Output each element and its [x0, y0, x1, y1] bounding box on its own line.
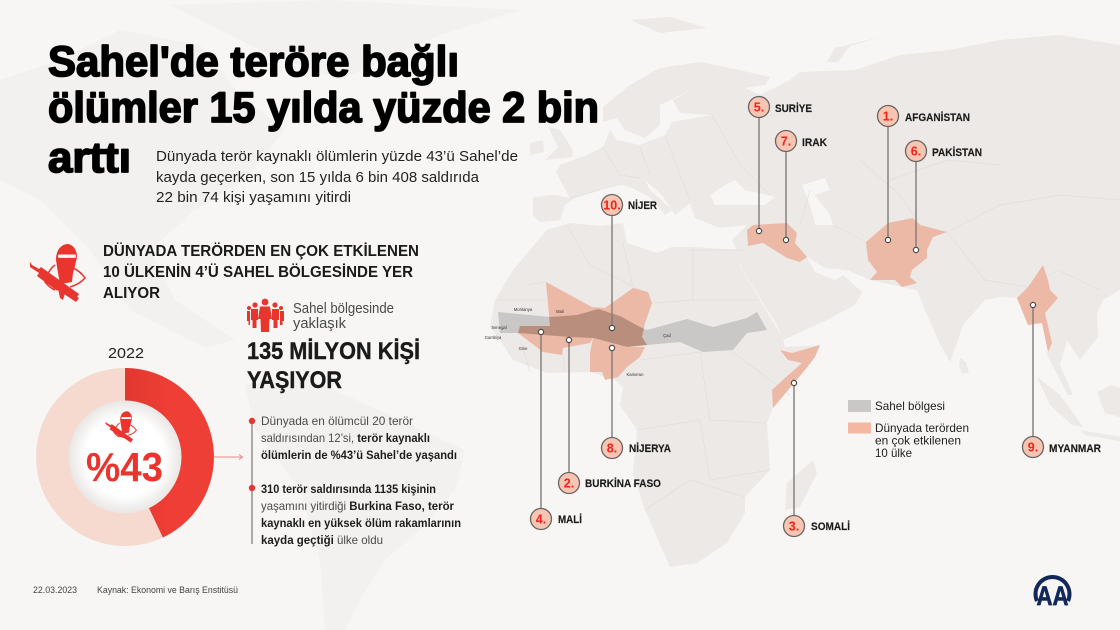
text: burkina faso: yaşamını yitirdiği Burkina Faso, terör — [261, 499, 454, 513]
pin 7 iraq: 7. — [781, 134, 791, 148]
pin 2 burkina faso: 2. — [564, 476, 574, 490]
subtitle: 22 bin 74 kişi yaşamını yitirdi — [156, 190, 351, 206]
text: deadliest attacks: Dünyada en ölümcül 20 terör — [261, 414, 413, 428]
pin 2 burkina faso — [558, 337, 661, 494]
subtitle — [156, 149, 518, 206]
text: deadliest attacks — [261, 414, 457, 462]
map country names: Moritanya — [514, 307, 533, 312]
text: population figure: YAŞIYOR — [247, 367, 342, 394]
sahel region band — [498, 309, 767, 352]
pin 9 myanmar: 9. — [1028, 440, 1038, 454]
map country names — [485, 307, 672, 377]
pin 1 afghanistan — [878, 106, 970, 243]
map country names: Mali — [556, 309, 564, 314]
text: sahel population intro: Sahel bölgesinde — [293, 301, 394, 317]
pin 5 syria — [748, 96, 812, 234]
pin 4 mali: MALİ — [558, 513, 582, 526]
pin 1 afghanistan: AFGANİSTAN — [905, 111, 970, 124]
legend: 10 ülke — [875, 446, 912, 460]
pin 8 nigeria: NİJERYA — [629, 442, 671, 455]
text: deadliest attacks: saldırısından 12’si, terör kaynaklı — [261, 431, 430, 445]
pin 10 niger — [602, 194, 657, 331]
country: myanmar — [1017, 265, 1058, 352]
text: sahel population intro: yaklaşık — [293, 316, 347, 332]
logo: AA: AA — [1036, 581, 1068, 611]
heading: affected countries: 10 ÜLKENİN 4’Ü SAHEL BÖLGESİNDE YER — [103, 264, 413, 281]
icon: militant — [30, 244, 85, 302]
pin 5 syria: 5. — [754, 100, 764, 114]
map country names: Kamerun — [626, 372, 644, 377]
year label: 2022 — [108, 345, 144, 362]
pin 3 somalia — [784, 380, 850, 536]
pin 6 pakistan: 6. — [911, 144, 921, 158]
pin 2 burkina faso: BURKİNA FASO — [585, 477, 661, 490]
sahel overlap on countries — [518, 309, 647, 347]
text: burkina faso: kaynaklı en yüksek ölüm rakamlarının — [261, 516, 461, 530]
map: borders — [495, 115, 1120, 510]
pin 4 mali: 4. — [536, 512, 546, 526]
map country names: Gambiya — [485, 335, 502, 340]
map: africa — [490, 223, 820, 567]
icon: militant small — [106, 411, 136, 443]
pin 9 myanmar — [1022, 302, 1101, 458]
pin 1 afghanistan: 1. — [883, 110, 893, 124]
pin 3 somalia: SOMALİ — [811, 520, 850, 533]
pin 7 iraq — [776, 130, 827, 243]
map: americas — [0, 0, 520, 630]
heading: affected countries: ALIYOR — [103, 285, 160, 302]
map: inland seas — [710, 178, 833, 225]
title: Sahel'de teröre bağlı — [48, 38, 459, 86]
pin 8 nigeria — [602, 345, 671, 458]
most affected countries — [518, 218, 1058, 408]
subtitle: Dünyada terör kaynaklı ölümlerin yüzde 43’ü Sahel’de — [156, 149, 518, 165]
map: eurasia — [533, 35, 1120, 395]
map country names: Çad — [663, 333, 672, 338]
title: arttı — [48, 134, 131, 182]
text: burkina faso: kayda geçtiği ülke oldu — [261, 533, 383, 547]
pin 9 myanmar: MYANMAR — [1049, 443, 1101, 455]
pin 3 somalia: 3. — [789, 520, 799, 534]
text: burkina faso — [261, 482, 461, 547]
country: syria iraq — [747, 223, 807, 262]
country: nigeria — [590, 338, 645, 380]
pin 10 niger: NİJER — [628, 199, 657, 212]
title — [48, 38, 599, 182]
pin 6 pakistan — [906, 140, 982, 253]
pin 4 mali — [530, 329, 582, 530]
country: mali burkina niger — [518, 282, 652, 355]
footer: date and source: 22.03.2023 — [33, 585, 77, 596]
pin 8 nigeria: 8. — [607, 442, 617, 456]
legend: Sahel bölgesi — [875, 399, 945, 413]
country: somalia — [772, 345, 820, 408]
pin 10 niger: 10. — [603, 198, 621, 212]
map: islands — [530, 17, 1120, 510]
text: population figure: 135 MİLYON KİŞİ — [247, 338, 420, 365]
heading: affected countries: DÜNYADA TERÖRDEN EN ÇOK ETKİLENEN — [103, 243, 419, 260]
heading: affected countries — [103, 243, 419, 302]
pin 5 syria: SURİYE — [775, 102, 812, 115]
text: population figure — [247, 338, 420, 394]
text: deadliest attacks: ölümlerin de %43’ü Sahel’de yaşandı — [261, 448, 457, 462]
map country names: Senegal — [491, 325, 507, 330]
arrow: donut to text — [214, 454, 242, 460]
map country names: Gine — [519, 346, 528, 351]
legend: en çok etkilenen — [875, 434, 961, 448]
pin 6 pakistan: PAKİSTAN — [932, 146, 982, 159]
donut value: %43 — [86, 444, 163, 490]
text: sahel population intro — [293, 301, 394, 332]
legend: Dünyada terörden — [875, 421, 969, 435]
pin 7 iraq: IRAK — [802, 137, 827, 149]
subtitle: kayda geçerken, son 15 yılda 6 bin 408 saldırıda — [156, 170, 480, 186]
icon: people — [247, 299, 284, 332]
footer: date and source: Kaynak: Ekonomi ve Barış Enstitüsü — [97, 585, 238, 596]
footer: date and source — [33, 585, 238, 596]
legend — [848, 399, 969, 460]
donut chart — [36, 368, 214, 546]
text: burkina faso: 310 terör saldırısında 1135 kişinin — [261, 482, 436, 496]
timeline — [249, 418, 255, 544]
country: afghanistan pakistan — [866, 218, 947, 287]
title: ölümler 15 yılda yüzde 2 bin — [48, 84, 599, 132]
